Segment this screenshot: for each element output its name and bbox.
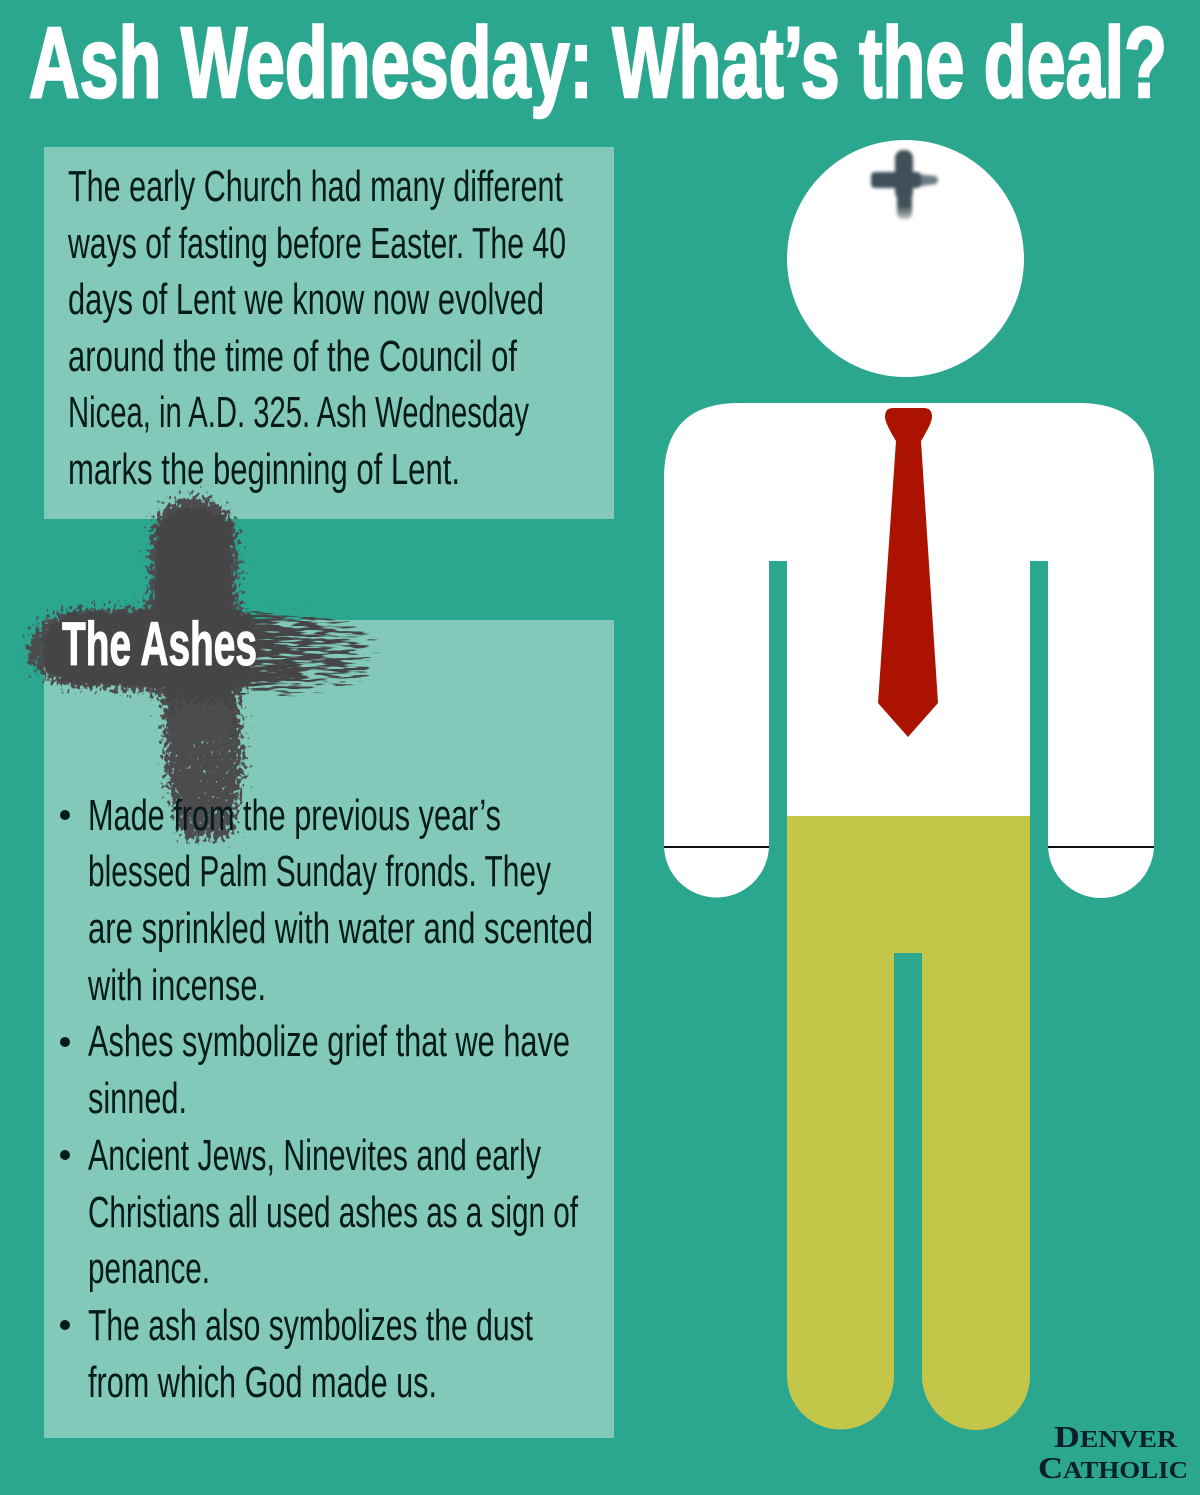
heading: The Ashes: The Ashes <box>62 610 257 678</box>
bullet 1: are sprinkled with water and scented <box>88 904 593 953</box>
logo: Denver Catholic: CATHOLIC <box>1038 1450 1188 1485</box>
text: intro paragraph: days of Lent we know now evolved <box>68 275 544 324</box>
bullet 4: from which God made us. <box>88 1358 437 1407</box>
text: intro paragraph <box>67 162 566 494</box>
bullet 2: Ashes symbolize grief that we have <box>88 1017 570 1066</box>
bullet 1: Made from the previous year’s <box>88 791 501 840</box>
logo: Denver Catholic: DENVER <box>1054 1419 1178 1454</box>
text: intro paragraph: Nicea, in A.D. 325. Ash Wednesday <box>68 388 529 437</box>
icon: large ash cross <box>26 494 382 840</box>
text: intro paragraph: marks the beginning of Lent. <box>68 445 460 494</box>
panel: intro background <box>44 147 614 519</box>
bullet 3 <box>60 1131 579 1293</box>
text: intro paragraph: ways of fasting before Easter. The 40 <box>67 219 566 268</box>
text: ashes bullet list <box>60 791 593 1407</box>
icon: small ash cross on forehead <box>871 150 938 219</box>
left cuff line <box>664 846 769 848</box>
bullet 1 <box>60 791 593 1010</box>
right cuff line <box>1048 846 1154 848</box>
torso and arms <box>664 403 1154 898</box>
bullet 2: sinned. <box>88 1074 187 1123</box>
bullet 3: Christians all used ashes as a sign of <box>88 1188 579 1237</box>
bullet 1: blessed Palm Sunday fronds. They <box>88 847 551 896</box>
text: intro paragraph: The early Church had many different <box>68 162 563 211</box>
bullet 4 <box>60 1301 533 1407</box>
bullet 3: Ancient Jews, Ninevites and early <box>88 1131 541 1180</box>
bullet 2 <box>60 1017 570 1123</box>
pants <box>787 816 1030 1430</box>
panel: the ashes background <box>44 620 614 1438</box>
logo: Denver Catholic <box>1038 1419 1188 1485</box>
head <box>787 140 1024 377</box>
bullet 4: The ash also symbolizes the dust <box>88 1301 533 1350</box>
necktie <box>878 408 938 737</box>
bullet 1: with incense. <box>87 961 266 1010</box>
bullet 3: penance. <box>88 1244 210 1293</box>
text: intro paragraph: around the time of the Council of <box>68 332 518 381</box>
figure: person with ash cross <box>664 140 1154 1430</box>
